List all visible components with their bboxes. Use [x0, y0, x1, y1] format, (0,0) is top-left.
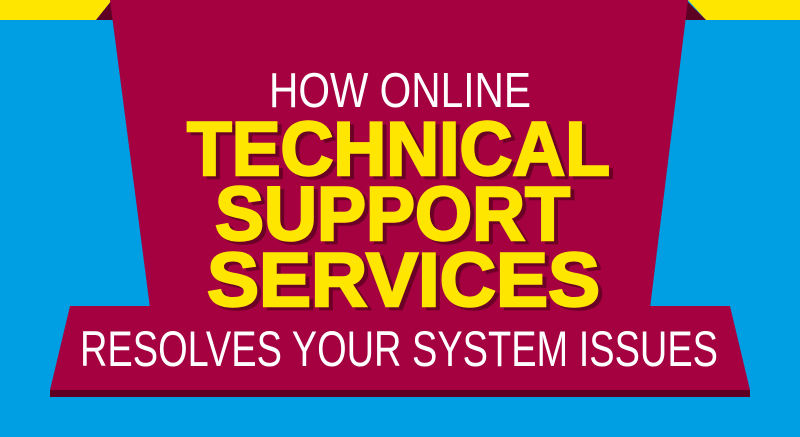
top yellow band right: [684, 0, 800, 20]
heading shadow: TECHNICAL: [191, 110, 614, 195]
heading: technical support services: [187, 107, 610, 323]
heading shadow: SERVICES: [211, 241, 604, 326]
heading shadow: [191, 110, 614, 326]
crimson main panel: [110, 0, 688, 308]
heading: technical support services: SERVICES: [207, 238, 600, 323]
bottom banner shadow: [50, 390, 750, 397]
heading: technical support services: SUPPORT: [215, 172, 570, 257]
heading: technical support services: TECHNICAL: [187, 107, 610, 192]
heading: how online: HOW ONLINE: [269, 64, 531, 118]
bottom banner: [50, 306, 750, 390]
top yellow band left: [0, 0, 114, 20]
heading shadow: SUPPORT: [219, 175, 574, 260]
